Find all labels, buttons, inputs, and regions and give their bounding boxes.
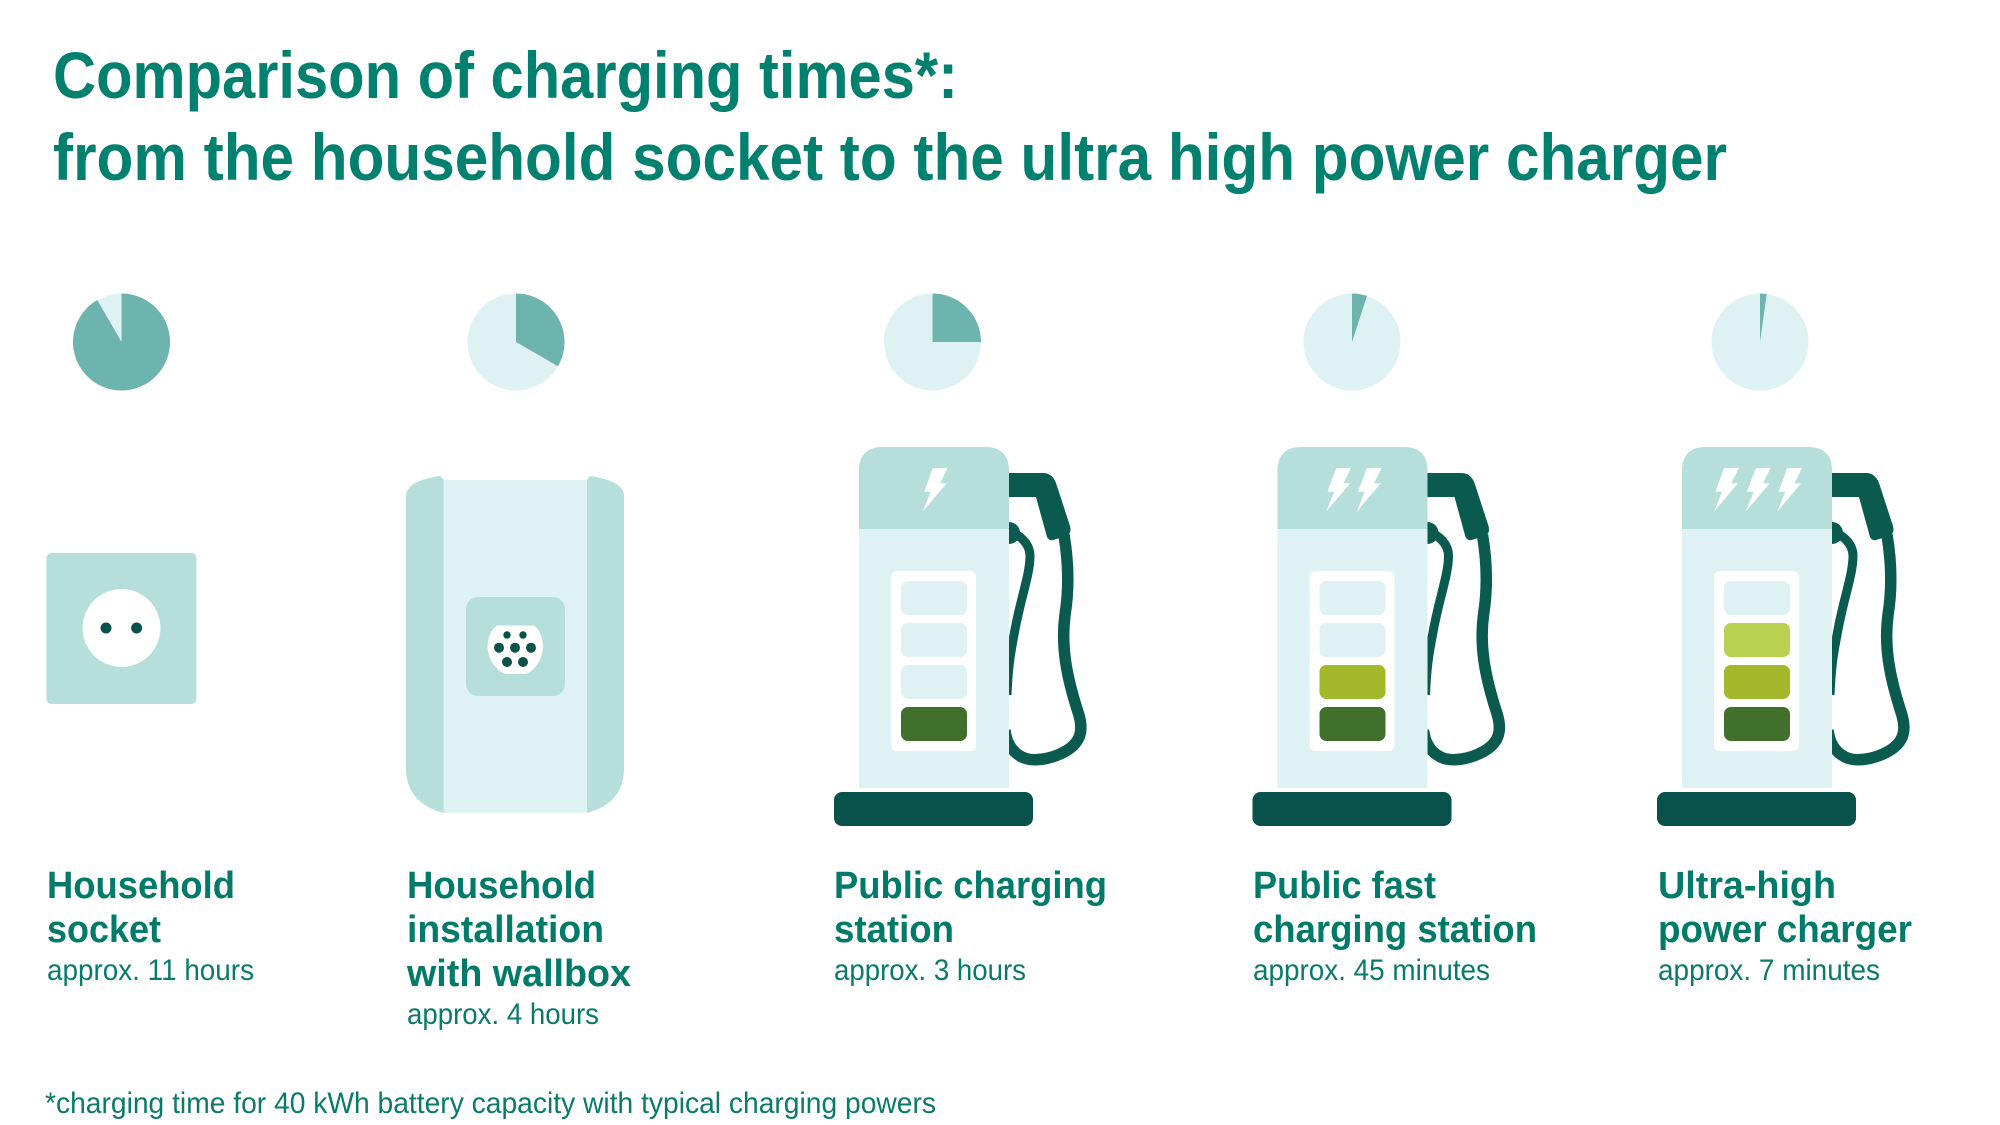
label: public fast charging station: charging station: [1253, 909, 1537, 951]
label: household socket: [47, 865, 254, 987]
pie chart: ultra-high power, 7 minutes: [1712, 294, 1808, 390]
pie chart: household socket, 11 hours: [73, 294, 170, 390]
label: public charging station: approx. 3 hours: [834, 954, 1026, 987]
label: household socket: Household: [47, 865, 235, 907]
icon: public charging station: [834, 447, 1081, 826]
title: Comparison of charging times*:: [53, 38, 958, 112]
label: public fast charging station: Public fast: [1253, 865, 1436, 907]
label: wallbox: installation: [407, 909, 604, 951]
pie chart: public station, 3 hours: [884, 294, 981, 390]
pie chart: wallbox, 4 hours: [468, 294, 564, 390]
label: public fast charging station: approx. 45 minutes: [1253, 954, 1490, 987]
label: public charging station: Public charging: [834, 865, 1107, 907]
label: household socket: socket: [47, 909, 161, 951]
label: wallbox: with wallbox: [406, 953, 631, 995]
label: ultra-high power charger: approx. 7 minutes: [1658, 954, 1880, 987]
label: public charging station: station: [834, 909, 954, 951]
label: ultra-high power charger: [1658, 865, 1912, 987]
label: wallbox: approx. 4 hours: [407, 998, 599, 1031]
icon: ultra-high power charger: [1657, 447, 1904, 826]
label: ultra-high power charger: power charger: [1658, 909, 1912, 951]
icon: public fast charging station: [1252, 447, 1499, 826]
label: household socket: approx. 11 hours: [47, 954, 254, 987]
footnote: *charging time for 40 kWh battery capacity with typical charging powers: [45, 1087, 936, 1120]
label: wallbox: Household: [407, 865, 596, 907]
label: ultra-high power charger: Ultra-high: [1658, 865, 1836, 907]
label: wallbox: [406, 865, 631, 1031]
title: from the household socket to the ultra high power charger: [53, 120, 1727, 194]
pie chart: fast station, 45 minutes: [1304, 294, 1400, 390]
title: [53, 38, 1727, 194]
icon: wallbox: [406, 476, 624, 813]
icon: household socket: [46, 553, 196, 704]
label: public fast charging station: [1253, 865, 1537, 987]
label: public charging station: [834, 865, 1107, 987]
